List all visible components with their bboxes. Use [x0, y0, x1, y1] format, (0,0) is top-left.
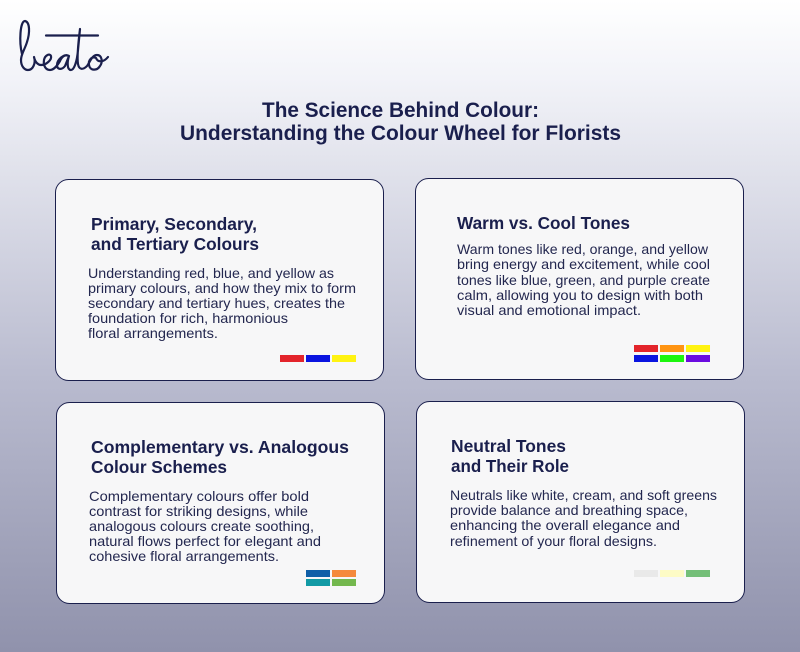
swatches: neutral colours — [634, 570, 710, 577]
panel: complementary vs analogous — [56, 402, 384, 604]
text block: complementary description: cohesive floral arrangements. — [89, 548, 279, 564]
text block: primary colours description — [88, 265, 356, 341]
text block: complementary description: Complementary colours offer bold — [89, 488, 309, 504]
swatches: red, blue, yellow — [280, 355, 356, 362]
text block: complementary description: contrast for striking designs, while — [89, 503, 308, 519]
text block: warm vs cool description: calm, allowing you to design with both — [457, 287, 703, 303]
swatches: complementary and analogous — [306, 570, 356, 586]
text block: neutral tones description: enhancing the overall elegance and — [450, 517, 680, 533]
heading: neutral tones: Neutral Tones — [451, 436, 566, 456]
panel: neutral tones — [416, 402, 744, 602]
heading: neutral tones — [451, 436, 569, 476]
text block: warm vs cool description: tones like blue, green, and purple create — [457, 272, 710, 288]
text block: neutral tones description: refinement of your floral designs. — [450, 533, 657, 549]
text block: neutral tones description — [450, 487, 717, 549]
text block: complementary description: analogous colours create soothing, — [89, 518, 314, 534]
heading: neutral tones: and Their Role — [451, 456, 569, 476]
text block: primary colours description: foundation for rich, harmonious — [88, 310, 288, 326]
logo: beato — [20, 21, 108, 70]
panel: warm vs cool tones — [416, 178, 744, 380]
heading: warm vs cool: Warm vs. Cool Tones — [457, 213, 630, 233]
heading: complementary vs analogous: Colour Schemes — [91, 457, 227, 477]
text block: warm vs cool description: bring energy and excitement, while cool — [457, 256, 710, 272]
text block: neutral tones description: provide balance and breathing space, — [450, 502, 688, 518]
panel: primary, secondary and tertiary colours — [56, 180, 384, 380]
text block: warm vs cool description: visual and emotional impact. — [457, 302, 641, 318]
heading: primary, secondary, tertiary: Primary, Secondary, — [91, 214, 257, 234]
text block: primary colours description: secondary and tertiary hues, creates the — [88, 295, 345, 311]
text block: warm vs cool description — [457, 241, 710, 318]
heading: complementary vs analogous — [91, 437, 349, 477]
title: The Science Behind Colour: — [262, 99, 539, 122]
heading: primary, secondary, tertiary: and Tertiary Colours — [91, 234, 259, 254]
text block: primary colours description: Understanding red, blue, and yellow as — [88, 265, 334, 281]
title: Understanding the Colour Wheel for Florists — [180, 122, 621, 145]
text block: complementary description: natural flows perfect for elegant and — [89, 533, 321, 549]
title — [180, 99, 621, 145]
text block: neutral tones description: Neutrals like white, cream, and soft greens — [450, 487, 717, 503]
text block: warm vs cool description: Warm tones like red, orange, and yellow — [457, 241, 709, 257]
heading: complementary vs analogous: Complementary vs. Analogous — [91, 437, 349, 457]
text block: primary colours description: primary colours, and how they mix to form — [88, 280, 356, 296]
text block: complementary description — [89, 488, 321, 564]
heading: primary, secondary, tertiary — [91, 214, 259, 254]
text block: primary colours description: floral arrangements. — [88, 325, 218, 341]
swatches: warm and cool colours — [634, 345, 710, 362]
